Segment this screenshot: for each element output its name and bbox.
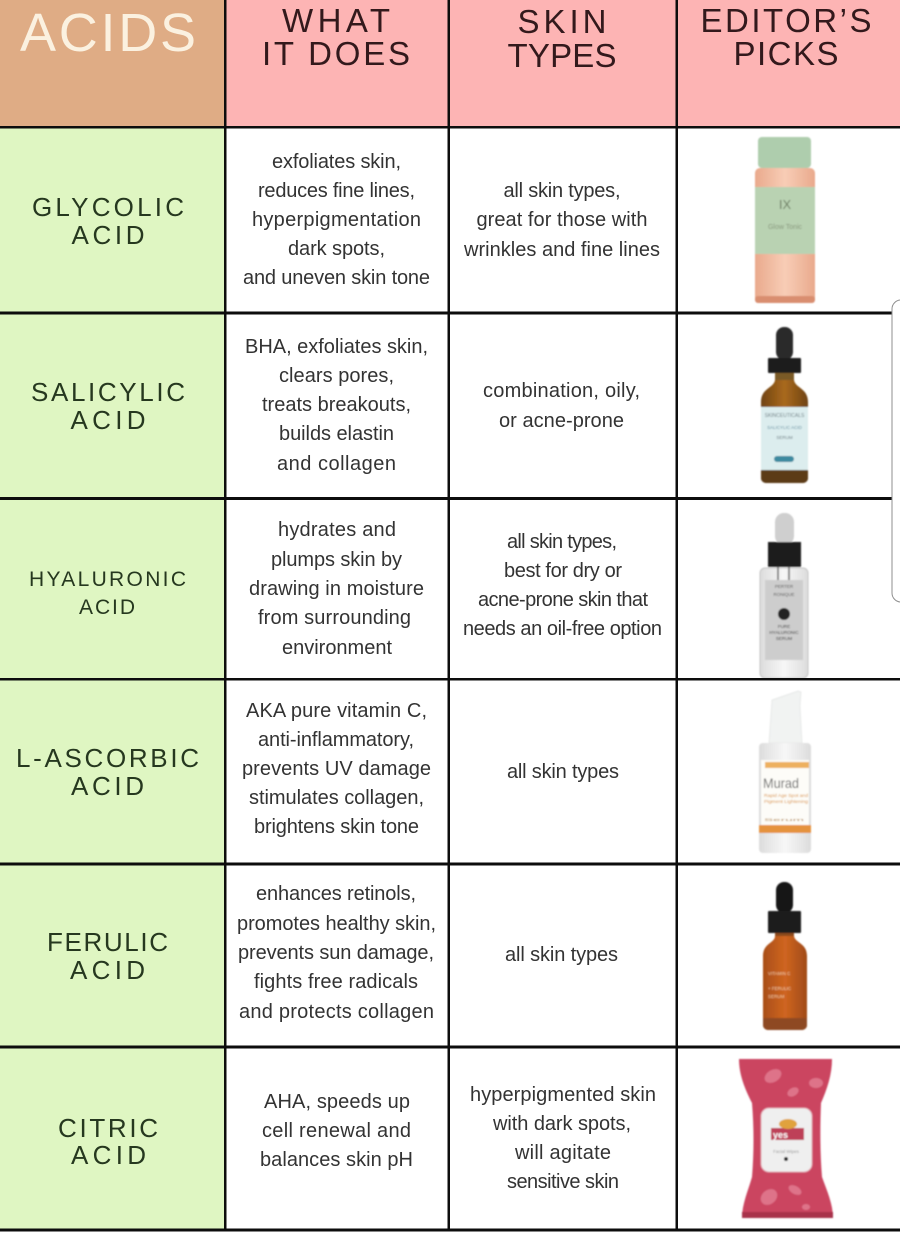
skin types: glycolic: wrinkles and fine lines [463, 239, 660, 261]
skin types: salicylic: or acne-prone [499, 410, 624, 432]
row: citric acid [58, 1059, 833, 1218]
product: orange dropper bottle [763, 882, 807, 1030]
product: clear dropper bottle: SERUM [776, 636, 792, 641]
what it does: glycolic: reduces fine lines, [258, 180, 415, 202]
skin types: citric: sensitive skin [507, 1171, 619, 1193]
product: murad pump bottle: Rapid Age Spot and [764, 793, 809, 798]
skin types: glycolic: all skin types, [504, 180, 620, 202]
what it does: citric: AHA, speeds up [264, 1091, 410, 1113]
what it does: ferulic: fights free radicals [254, 971, 418, 993]
product: yes to wipes package: Facial Wipes [773, 1149, 800, 1154]
product: amber dropper bottle: SERUM [776, 435, 793, 440]
product: murad pump bottle [759, 691, 811, 853]
what it does: l-ascorbic: anti-inflammatory, [258, 729, 414, 751]
what it does: hyaluronic [249, 519, 424, 659]
what it does: hyaluronic: from surrounding [258, 607, 411, 629]
acid name column background [0, 127, 225, 1230]
skin types: glycolic [463, 180, 660, 261]
what it does: hyaluronic: hydrates and [278, 519, 396, 541]
acid name: hyaluronic: ACID [79, 596, 135, 619]
what it does: citric: cell renewal and [262, 1120, 411, 1142]
header: what it does: IT DOES [262, 35, 410, 72]
skin types: l-ascorbic: all skin types [507, 761, 619, 783]
acid name: glycolic [32, 192, 184, 250]
skin types: hyaluronic: acne-prone skin that [478, 589, 648, 611]
skin types: hyaluronic: best for dry or [504, 560, 622, 582]
header: skin types: SKIN [518, 3, 606, 40]
product: orange dropper bottle: + FERULIC [768, 986, 792, 991]
acid name: l-ascorbic [16, 743, 199, 801]
what it does: l-ascorbic [242, 700, 431, 838]
acid name: ferulic: FERULIC [47, 927, 168, 957]
skin types: hyaluronic: needs an oil-free option [463, 618, 662, 640]
header row [0, 0, 900, 127]
product: pixi glow tonic bottle [755, 137, 815, 303]
row: ferulic acid [47, 882, 807, 1030]
product: clear dropper bottle: PURE [778, 624, 790, 629]
what it does: citric [260, 1091, 413, 1171]
product: clear dropper bottle: PERTER [775, 584, 794, 589]
acid name: citric [58, 1113, 158, 1170]
product: amber dropper bottle: SALICYLIC ACID [767, 425, 803, 430]
header: editor's picks: EDITOR’S [700, 2, 872, 39]
product: yes to wipes package: yes [773, 1130, 788, 1140]
what it does: glycolic: hyperpigmentation [252, 209, 421, 231]
what it does: glycolic [243, 151, 430, 289]
row: glycolic acid [32, 137, 815, 303]
acid name: citric: ACID [71, 1140, 146, 1170]
header: what it does: WHAT [282, 2, 390, 39]
what it does: l-ascorbic: AKA pure vitamin C, [246, 700, 427, 722]
product: yes to wipes package [739, 1059, 833, 1218]
skin types: hyaluronic [463, 531, 662, 640]
product: clear dropper bottle: RONIQUE [773, 592, 795, 597]
what it does: l-ascorbic: prevents UV damage [242, 758, 431, 780]
what it does: ferulic [237, 883, 436, 1023]
what it does: hyaluronic: environment [282, 637, 392, 659]
acid name: salicylic [31, 377, 185, 435]
what it does: l-ascorbic: stimulates collagen, [249, 787, 424, 809]
skin types: citric: hyperpigmented skin [470, 1084, 656, 1106]
header: what it does [225, 0, 449, 127]
what it does: salicylic: BHA, exfoliates skin, [245, 336, 428, 358]
acid name: l-ascorbic: L-ASCORBIC [16, 743, 199, 773]
skin types: citric [470, 1084, 656, 1193]
acid name: citric: CITRIC [58, 1113, 158, 1143]
what it does: ferulic: prevents sun damage, [238, 942, 434, 964]
product: pixi glow tonic bottle: Glow Tonic [768, 224, 803, 231]
screen edge tab overlay [892, 300, 900, 602]
what it does: citric: balances skin pH [260, 1149, 413, 1171]
acid name: salicylic: ACID [70, 405, 146, 435]
skin types: ferulic: all skin types [505, 944, 618, 966]
skin types: salicylic: combination, oily, [483, 380, 640, 402]
header: acids: ACIDS [20, 3, 196, 63]
what it does: salicylic: and collagen [277, 453, 396, 475]
skin types: citric: will agitate [514, 1142, 611, 1164]
product: murad pump bottle: Serum [764, 817, 806, 822]
row: l-ascorbic acid [16, 691, 811, 853]
what it does: l-ascorbic: brightens skin tone [254, 816, 419, 838]
acid name: hyaluronic: HYALURONIC [29, 568, 186, 591]
product: orange dropper bottle: SERUM [768, 994, 785, 999]
product: amber dropper bottle [761, 327, 808, 483]
what it does: ferulic: promotes healthy skin, [237, 913, 436, 935]
what it does: glycolic: and uneven skin tone [243, 267, 430, 289]
product: pixi glow tonic bottle: IX [779, 197, 791, 212]
acid name: hyaluronic [29, 568, 186, 619]
acid name: ferulic: ACID [70, 955, 145, 985]
header: editor's picks: PICKS [734, 35, 838, 72]
acid name: glycolic: ACID [72, 220, 144, 250]
what it does: salicylic [245, 336, 428, 475]
what it does: salicylic: treats breakouts, [262, 394, 411, 416]
acid name: l-ascorbic: ACID [71, 771, 144, 801]
skin types: salicylic [483, 380, 640, 432]
acid name: ferulic [47, 927, 168, 985]
skin types: glycolic: great for those with [476, 209, 648, 231]
header: skin types: TYPES [508, 37, 616, 74]
product: amber dropper bottle: SKINCEUTICALS [765, 413, 805, 419]
product: murad pump bottle: Murad [763, 775, 799, 791]
skin types: citric: with dark spots, [492, 1113, 631, 1135]
row: hyaluronic acid [29, 513, 808, 678]
what it does: ferulic: and protects collagen [239, 1001, 434, 1023]
product: clear dropper bottle [760, 513, 808, 678]
what it does: glycolic: dark spots, [288, 238, 385, 260]
what it does: salicylic: builds elastin [279, 423, 394, 445]
acid name: salicylic: SALICYLIC [31, 377, 185, 407]
row: salicylic acid [31, 327, 808, 483]
acid name: glycolic: GLYCOLIC [32, 192, 184, 222]
what it does: hyaluronic: drawing in moisture [249, 578, 424, 600]
header: acids [0, 0, 225, 127]
header: editor's picks [677, 0, 900, 127]
product: orange dropper bottle: VITAMIN C [768, 971, 791, 976]
what it does: salicylic: clears pores, [279, 365, 394, 387]
header: skin types [449, 0, 677, 127]
product: murad pump bottle: Pigment Lightening [764, 799, 809, 804]
product: clear dropper bottle: HYALURONIC [769, 630, 799, 635]
skin types: hyaluronic: all skin types, [507, 531, 617, 553]
what it does: glycolic: exfoliates skin, [272, 151, 401, 173]
what it does: hyaluronic: plumps skin by [271, 549, 402, 571]
what it does: ferulic: enhances retinols, [256, 883, 416, 905]
